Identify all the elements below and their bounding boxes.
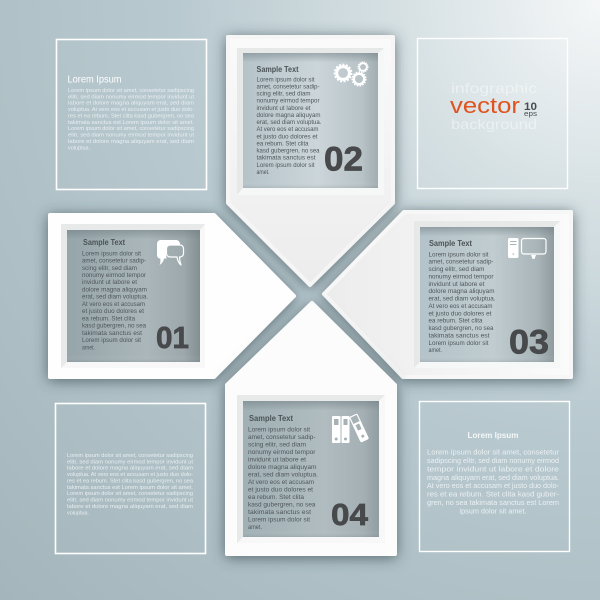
- text block: 04 body: takimata sanctus est: [248, 509, 311, 516]
- text block: 01 body: nonumy eirmod tempor: [82, 272, 147, 279]
- text block: top left body: voluptua. At vero eos et accusam et justo duo dolo-: [68, 107, 194, 113]
- text block: top left body: labore et dolore magna aliquyam erat, sed diam: [68, 139, 195, 145]
- text block: 04 body: amet.: [248, 524, 262, 531]
- panel: bottom left outlined text box: voluptua.: [67, 510, 89, 516]
- text block: 02 body: dolore magna aliquyam: [256, 112, 321, 119]
- text block: 04 body: kasd gubergren, no sea: [248, 501, 316, 508]
- text block: 03 body: takimata sanctus est: [428, 332, 490, 340]
- text block: 02 body: At vero eos et accusam: [256, 126, 319, 133]
- text: background: background: [451, 116, 537, 132]
- panel: top left outlined text box: [56, 40, 206, 190]
- icon: desktop computer: [508, 238, 546, 259]
- panel: bottom right outlined text box: magna aliquyam erat, sed diam voluptua.: [427, 473, 559, 482]
- text block: 02 body: Lorem ipsum dolor sit: [256, 76, 315, 83]
- text block: 02 body: nonumy eirmod tempor: [256, 98, 320, 105]
- text block: 01 body: [82, 250, 148, 351]
- text: 10: 10: [524, 101, 537, 113]
- text block: 04 body: invidunt ut labore et: [248, 456, 306, 463]
- text block: 01 body: Lorem ipsum dolor sit: [82, 250, 141, 257]
- text block: 01 body: invidunt ut labore et: [82, 279, 137, 286]
- panel: top right outlined logo box: [418, 38, 568, 188]
- number: 03: 03: [509, 324, 549, 362]
- text block: 03 body: [428, 251, 496, 354]
- text block: 03 body: invidunt ut labore et: [428, 281, 485, 288]
- text block: 04 body: dolore magna aliquyam: [248, 464, 317, 471]
- panel: bottom left outlined text box: elitr, sed diam nonumy eirmod tempor invidunt ut: [67, 459, 194, 465]
- text block: 02 body: scing elitr, sed diam: [256, 91, 311, 98]
- icon: speech bubbles: [157, 240, 184, 265]
- text block: 01 body: ea rebum. Stet clita: [82, 315, 135, 322]
- text block: 03 body: Lorem ipsum dolor sit: [428, 340, 489, 347]
- heading: sample text 01: Sample Text: [83, 238, 125, 247]
- panel: bottom right outlined text box: res et ea rebum. Stet clita kasd guber-: [427, 490, 560, 499]
- icon: gears: [335, 62, 368, 86]
- text block: 03 body: At vero eos et accusam: [428, 303, 493, 310]
- panel: bottom right outlined text box: Lorem ipsum dolor sit amet, consetetur: [427, 448, 560, 456]
- text block: 04 body: erat, sed diam voluptua.: [248, 471, 318, 478]
- text: infographic: infographic: [451, 80, 537, 96]
- panel: bottom left outlined text box: takimata sanctus est Lorem ipsum dolor sit amet.: [67, 485, 193, 491]
- text block: 01 body: kasd gubergren, no sea: [82, 323, 146, 330]
- text block: 01 body: At vero eos et accusam: [82, 301, 145, 308]
- text block: 02 body: Lorem ipsum dolor sit: [256, 162, 315, 169]
- text block: top left body: labore et dolore magna aliquyam erat, sed diam: [68, 101, 195, 107]
- text block: 02 body: et justo duo dolores et: [256, 133, 318, 140]
- panel: 01 left arrow: [50, 215, 294, 377]
- panel: bottom right outlined text box: At vero eos et accusam et justo duo dolo-: [427, 481, 560, 490]
- text block: 01 body: amet, consetetur sadip-: [82, 258, 146, 264]
- text block: top left body: elitr, sed diam nonumy eirmod tempor invidunt ut: [68, 94, 195, 100]
- text block: 03 body: nonumy eirmod tempor: [428, 273, 494, 280]
- text: eps: eps: [524, 111, 538, 118]
- text block: 01 body: erat, sed diam voluptua.: [82, 294, 148, 301]
- panel: bottom left outlined text box: voluptua. At vero eos et accusam et justo duo dolo-: [67, 472, 193, 478]
- text block: 02 body: amet.: [256, 169, 270, 176]
- number: 01: 01: [156, 320, 189, 355]
- panel: bottom right outlined text box: [420, 402, 570, 552]
- text block: 03 body: kasd gubergren, no sea: [428, 325, 494, 332]
- heading: lorem ipsum centered: Lorem Ipsum: [468, 430, 519, 440]
- text block: 04 body: nonumy eirmod tempor: [248, 449, 316, 456]
- text block: 03 body: Lorem ipsum dolor sit: [428, 251, 489, 258]
- text block: 02 body: amet, consetetur sadip-: [256, 83, 320, 90]
- heading: sample text 03: Sample Text: [429, 239, 472, 248]
- text block: 04 body: amet, consetetur sadip-: [248, 434, 316, 441]
- heading: sample text 04: Sample Text: [249, 414, 293, 423]
- text block: 03 body: amet, consetetur sadip-: [428, 259, 494, 266]
- text: vector: vector: [450, 93, 521, 118]
- panel: bottom right outlined text box: ipsum dolor sit amet.: [460, 506, 526, 516]
- panel: bottom left outlined text box: res et ea rebum. Stet clita kasd gubergren, no sea: [67, 478, 193, 484]
- text block: top left body: Lorem ipsum dolor sit amet, consetetur sadipscing: [68, 126, 194, 132]
- text block: 01 body: dolore magna aliquyam: [82, 286, 147, 294]
- text block: 03 body: scing elitr, sed diam: [428, 266, 485, 273]
- heading: sample text 02: Sample Text: [256, 65, 299, 74]
- text block: 03 body: dolore magna aliquyam: [428, 288, 495, 295]
- text block: 01 body: et justo duo dolores et: [82, 308, 144, 315]
- text block: 02 body: invidunt ut labore et: [256, 105, 311, 112]
- text block: 03 body: erat, sed diam voluptua.: [428, 296, 496, 303]
- text block: 01 body: Lorem ipsum dolor sit: [82, 337, 141, 344]
- panel: 04 bottom arrow: [227, 303, 395, 554]
- panel: bottom left outlined text box: labore et dolore magna aliquyam erat, sed diam: [67, 504, 194, 510]
- heading: lorem ipsum: Lorem Ipsum: [68, 74, 122, 86]
- text block: 02 body: ea rebum. Stet clita: [256, 140, 309, 148]
- text block: 03 body: et justo duo dolores et: [428, 310, 492, 317]
- text block: 02 body: kasd gubergren, no sea: [256, 148, 320, 155]
- text block: 04 body: Lorem ipsum dolor sit: [248, 426, 310, 433]
- text block: top left body: takimata sanctus est Lorem ipsum dolor sit amet.: [68, 120, 194, 126]
- text block: top left body: voluptua.: [68, 145, 90, 151]
- text block: 02 body: erat, sed diam voluptua.: [256, 119, 322, 126]
- window: 04: [243, 401, 379, 537]
- panel: bottom right outlined text box: tempor invidunt ut labore et dolore: [427, 464, 559, 473]
- window: 01: [67, 230, 200, 362]
- text block: 01 body: scing elitr, sed diam: [82, 265, 137, 272]
- text block: 04 body: [248, 426, 318, 531]
- window: 02: [243, 53, 378, 188]
- text block: 04 body: Lorem ipsum dolor sit: [248, 516, 310, 523]
- text block: 02 body: [256, 76, 322, 176]
- text block: top left body: res et ea rebum. Stet clita kasd gubergren, no sea: [68, 114, 194, 120]
- icon: binders: [332, 414, 368, 443]
- number: 02: 02: [324, 140, 363, 178]
- panel: 03 right arrow: [324, 212, 571, 377]
- window: 03: [420, 227, 554, 362]
- panel: bottom right outlined text box: gren, no sea takimata sanctus est Lorem: [427, 498, 559, 507]
- panel: bottom left outlined text box: Lorem ipsum dolor sit amet, consetetur sadipscing: [67, 453, 193, 459]
- text block: top left body: elitr, sed diam nonumy eirmod tempor invidunt ut: [68, 133, 195, 139]
- number: 04: 04: [331, 497, 369, 532]
- text block: top left body: Lorem ipsum dolor sit amet, consetetur sadipscing: [68, 88, 194, 94]
- text block: 04 body: At vero eos et accusam: [248, 479, 314, 486]
- text block: 01 body: takimata sanctus est: [82, 330, 142, 337]
- text block: 02 body: takimata sanctus est: [256, 155, 316, 162]
- panel: bottom right outlined text box: sadipscing elitr, sed diam nonumy eirmod: [427, 456, 559, 465]
- text block: 04 body: ea rebum. Stet clita: [248, 494, 304, 501]
- text block: top left body: [68, 88, 195, 151]
- panel: 02 top arrow: [228, 37, 393, 285]
- panel: bottom left outlined text box: Lorem ipsum dolor sit amet, consetetur sadipscing: [67, 491, 193, 497]
- panel: bottom left outlined text box: elitr, sed diam nonumy eirmod tempor invidunt ut: [67, 498, 194, 504]
- text block: 01 body: amet.: [82, 344, 95, 351]
- text block: 03 body: ea rebum. Stet clita: [428, 318, 483, 325]
- text block: 04 body: scing elitr, sed diam: [248, 441, 307, 448]
- panel: bottom left outlined text box: [56, 404, 206, 554]
- text block: 04 body: et justo duo dolores et: [248, 486, 313, 493]
- text block: 03 body: amet.: [428, 347, 442, 354]
- panel: bottom left outlined text box: labore et dolore magna aliquyam erat, sed diam: [67, 466, 194, 472]
